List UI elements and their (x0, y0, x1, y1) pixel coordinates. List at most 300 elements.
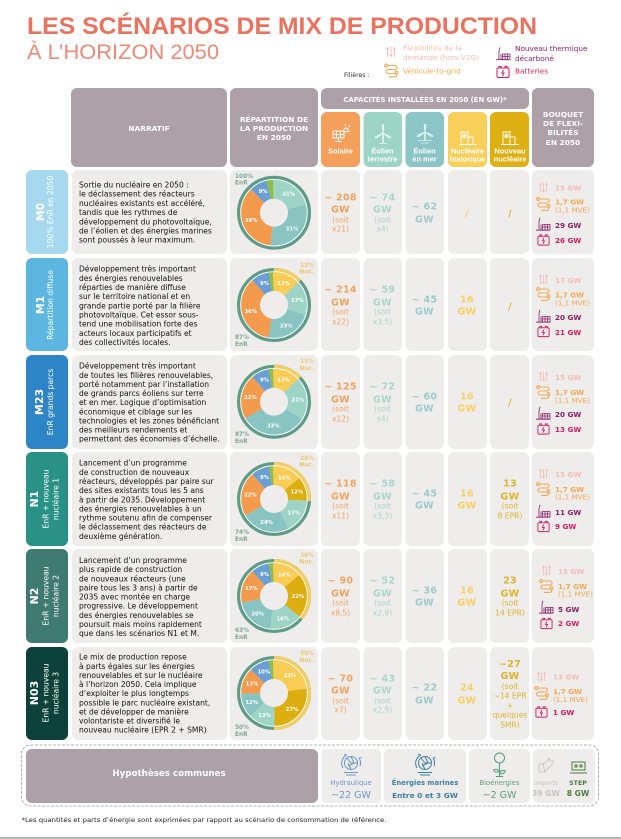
scenario row: M1 (26, 258, 594, 351)
title (27, 12, 537, 64)
capacities: N2: 14 EPR) (495, 609, 525, 618)
capacities: M23: GW (415, 404, 434, 415)
narrative: N03: à l’horizon 2050. Cela implique (79, 680, 197, 689)
legend: batteries (497, 66, 548, 78)
capacities: N03: GW (373, 686, 392, 697)
donut chart: N2: 17% (245, 586, 258, 592)
capacities: M23: x12) (332, 415, 349, 424)
narrative: N2: progressive. Le développement (79, 602, 198, 611)
capacities: N03: + (507, 701, 513, 710)
donut chart: M23 (230, 355, 318, 449)
capacities: N03 (321, 647, 529, 740)
scenario tag: M0 (26, 170, 68, 254)
capacities: M1: GW (331, 297, 350, 308)
flexibility bouquet: M1: 21 GW (555, 328, 581, 337)
legend: flexibilités de la demande (386, 44, 479, 62)
column header: nucléaire historique: Nucléaire (451, 146, 484, 156)
donut chart: N03: 12% (245, 700, 259, 706)
scenario tag: M1 (26, 258, 68, 351)
narrative: M1: des collectivités locales. (79, 338, 171, 347)
tile: hydraulique: Hydraulique (330, 779, 372, 787)
flexibility bouquet: N1: (1,1 MVE) (555, 493, 590, 502)
capacities: M1: GW (415, 307, 434, 318)
donut chart: M1: 36% (244, 309, 258, 315)
narrative: M0: sont poussés à leur maximum. (79, 236, 195, 245)
capacities: M23: GW (373, 395, 392, 406)
narrative: M23: permettant des économies d’échelle. (79, 435, 220, 444)
narrative: M0: Sortie du nucléaire en 2050 : (79, 180, 189, 190)
capacities: M23: GW (458, 404, 477, 415)
donut chart: M1: Nuc. (299, 270, 314, 276)
narrative: N1: de construction de nouveaux (79, 468, 190, 477)
capacities: N1: ~ 45 (412, 489, 437, 500)
column header: solaire: Solaire (328, 146, 353, 156)
scenario row: N1 (26, 452, 594, 546)
scenario tag: N2 (26, 549, 68, 643)
capacities: N2: GW (373, 588, 392, 599)
narrative: N1: deuxième génération. (79, 532, 162, 541)
scenario tag: M23: EnR grands parcs (46, 369, 55, 435)
capacities: M0: / (465, 209, 469, 220)
scenario row: N2 (26, 549, 594, 643)
donut chart: N2: 63% (235, 628, 249, 634)
capacities: M23: GW (331, 395, 350, 406)
column header: nouveau nucléaire: Nouveau (494, 146, 526, 156)
flexibility bouquet: N2: (1,1 MVE) (558, 590, 593, 599)
footnote: *Les quantités et parts d’énergie sont exprimées par rapport au scénario de consommation de référence. (22, 816, 386, 824)
donut chart: N1: 9% (260, 475, 270, 481)
capacities: M1: / (508, 301, 512, 312)
capacities: N03: ~ 43 (370, 674, 395, 685)
narrative: N2: plus rapide de construction (79, 565, 182, 574)
header: répartition de la production: RÉPARTITION DE (240, 115, 308, 124)
narrative: M23: porté notamment par l’installation (79, 380, 209, 389)
flexibility bouquet: N1: 9 GW (555, 522, 576, 531)
capacities: N1: ~ 118 (324, 479, 357, 490)
scenario tag: N2: nucléaire 2 (52, 575, 60, 617)
capacities: N03: (soit (502, 682, 518, 691)
capacities: M1: (soit (332, 308, 349, 317)
scenario tag: N2: N2 (28, 588, 41, 604)
donut chart: M1: 23% (280, 324, 293, 330)
capacities: N1: (soit (502, 502, 518, 511)
narrative: N1: Lancement d’un programme (79, 459, 187, 468)
capacities: N03: ~ 70 (328, 674, 353, 685)
capacities: M1: ~ 59 (370, 285, 395, 296)
scenario tag: N03 (26, 647, 68, 740)
header: répartition de la production: EN 2050 (257, 133, 291, 142)
flexibility bouquet: M1 (532, 258, 594, 351)
capacities: N2: (soit (374, 599, 391, 608)
donut chart: M23: Nuc. (299, 366, 314, 372)
donut chart: M23: 13% (277, 378, 291, 384)
capacities: M0: (soit (332, 216, 349, 225)
donut chart: N1: 22% (244, 492, 257, 498)
flexibility bouquet: N03: 1 GW (553, 708, 574, 717)
capacities: M23: ~ 72 (370, 382, 395, 393)
tile: énergies marines: Énergies marines (392, 778, 458, 787)
capacities: N1: (soit (332, 502, 349, 511)
donut chart: N2: Nuc. (299, 560, 314, 566)
flexibility bouquet: M1: 20 GW (555, 313, 581, 322)
capacities: M1: (soit (374, 308, 391, 317)
scenario tag: N03: nucléaire 3 (52, 672, 60, 714)
capacities: M23: 16 (460, 392, 474, 403)
capacities: N2: GW (501, 588, 520, 599)
donut chart: M0: 21% (282, 192, 296, 198)
narrative: N2: que dans les scénarios N1 et M. (79, 629, 199, 638)
flexibility bouquet: N2: 5 GW (558, 605, 579, 614)
donut chart: N1: 12% (290, 490, 304, 496)
capacities: N2: (soit (502, 599, 518, 608)
narrative: N2: paire tous les 3 ans) à partir de (79, 583, 198, 592)
capacities: M1: x3,5) (373, 318, 392, 327)
column header: éolien en mer: en mer (412, 154, 437, 164)
scenario row: N03 (26, 647, 594, 740)
donut chart: N03: 10% (257, 669, 271, 675)
donut chart: M1: 13% (300, 263, 314, 269)
capacities: N1: GW (415, 501, 434, 512)
donut chart: N03: 13% (246, 682, 259, 688)
donut chart: N1: 24% (260, 520, 274, 526)
legend: filières: Filières : (344, 71, 370, 79)
capacities: N1: GW (373, 491, 392, 502)
capacities: N1: ~ 58 (370, 479, 395, 490)
flexibility bouquet: N2: 2 GW (558, 619, 579, 628)
capacities: N03: (soit (374, 697, 391, 706)
capacities: N2 (321, 549, 529, 643)
flexibility bouquet: M1: 17 GW (555, 276, 581, 285)
column header: nucléaire historique (448, 112, 487, 167)
capacities: N2: x2,9) (373, 609, 392, 618)
legend: nouveau thermique décarboné: Nouveau thermique (515, 44, 588, 53)
flexibility bouquet: N03: 1,7 GW (553, 687, 582, 696)
capacities: M23 (321, 355, 529, 449)
scenario tag: N2: EnR + nouveau (42, 566, 50, 625)
capacities: M1: GW (373, 297, 392, 308)
legend: flexibilités de la demande: demande (hors V2G) (403, 53, 479, 62)
narrative: M0: développement du photovoltaïque, (79, 217, 212, 226)
title: À L’HORIZON 2050 (27, 41, 219, 64)
narrative: N1: à partir de 2035. Développement (79, 495, 205, 504)
capacities: N03: ~ 22 (412, 683, 437, 694)
capacities: M0: ~ 208 (324, 193, 357, 204)
capacities: N03: GW (331, 686, 350, 697)
narrative: N1: réacteurs, développés par paire sur (79, 477, 215, 486)
scenario tag: N03: N03 (28, 681, 41, 705)
scenario tag: M23 (26, 355, 68, 449)
capacities: M0: ~ 74 (370, 193, 395, 204)
capacities: M0: ~ 62 (412, 202, 437, 213)
panel: hypothèses communes: Hypothèses communes (112, 768, 226, 779)
capacities: M23: ~ 125 (324, 382, 357, 393)
flexibility bouquet: N03 (532, 647, 594, 740)
donut chart: M23: 21% (292, 397, 305, 403)
flexibility bouquet: M23: 13 GW (555, 425, 581, 434)
capacities: N1: x3,3) (373, 512, 392, 521)
capacities: N03: GW (415, 696, 434, 707)
header: capacités installées (321, 88, 529, 109)
column header: éolien en mer: Éolien (413, 146, 436, 156)
donut chart: N03: 13% (258, 713, 272, 719)
narrative: M23: de grands parcs éoliens sur terre (79, 389, 204, 398)
legend: batteries: Batteries (515, 66, 548, 76)
donut chart: N1 (230, 452, 318, 546)
capacities: M0 (321, 170, 529, 254)
donut chart: M0: 36% (245, 218, 258, 224)
scenario row: M0 (26, 170, 594, 254)
tile: hydraulique: ~22 GW (331, 790, 372, 801)
capacities: M1: ~ 45 (412, 295, 437, 306)
narrative: N03: et de développer de manière (79, 708, 189, 716)
legend: nouveau thermique décarboné: décarboné (515, 54, 554, 63)
scenario tag: N1: EnR + nouveau (42, 469, 50, 528)
donut chart: N1: EnR (235, 537, 248, 543)
donut chart: N2: 22% (292, 594, 305, 600)
donut chart: M0: EnR (235, 180, 248, 186)
donut chart: M1: EnR (235, 342, 248, 348)
flexibility bouquet: M0: 29 GW (555, 221, 581, 230)
donut chart: N2: 36% (300, 553, 314, 559)
narrative: N03: Le mix de production repose (79, 653, 187, 662)
capacities: N1: GW (331, 491, 350, 502)
donut chart: N2: 14% (278, 572, 291, 578)
header: bouquet de flexibilités: BOUQUET (543, 110, 583, 119)
capacities: N2: 23 (503, 576, 517, 587)
column header: éolien terrestre: Éolien (371, 146, 394, 156)
narrative: N03: renouvelables et sur le nucléaire (79, 671, 203, 680)
narrative: M0 (72, 170, 227, 254)
narrative: M23 (72, 355, 227, 449)
narrative: M1: photovoltaïque. Cet essor sous- (79, 310, 199, 320)
donut chart: N2 (230, 549, 318, 643)
narrative: M23: économique et ciblage sur les (79, 407, 192, 416)
capacities: N1: GW (458, 501, 477, 512)
scenario tag: M23: M23 (33, 389, 46, 415)
narrative: N1: rythme soutenu afin de compenser (79, 514, 213, 522)
flexibility bouquet: M23: 15 GW (555, 373, 581, 382)
flexibility bouquet: M23: 1,7 GW (555, 388, 584, 397)
scenario tag: M1: Répartition diffuse (46, 270, 55, 340)
capacities: M0: / (508, 209, 512, 220)
header: bouquet de flexibilités (532, 88, 594, 167)
legend: nouveau thermique décarboné (496, 44, 588, 63)
flexibility bouquet: M23: 20 GW (555, 410, 581, 419)
donut chart: N03 (230, 647, 318, 740)
capacities: M23: (soit (332, 405, 349, 414)
flexibility bouquet: N03: 13 GW (553, 672, 579, 682)
narrative: N03: nouveau nucléaire (EPR 2 + SMR) (79, 726, 207, 735)
narrative: N2: 2035 avec montée en charge (79, 592, 190, 602)
capacities: M0: x4) (376, 225, 389, 234)
narrative: N03: à parts égales sur les énergies (79, 662, 195, 671)
capacities: N2: GW (331, 588, 350, 599)
capacities: M23: / (508, 398, 512, 409)
header: répartition de la production (230, 88, 318, 167)
narrative: M23: des meilleurs rendements et (79, 426, 187, 435)
tile: bioénergies: Bioénergies (480, 779, 520, 787)
capacities: N03: SMR) (500, 721, 520, 730)
narrative: M1: Développement très important (79, 265, 196, 274)
capacities: M0: (soit (374, 216, 391, 225)
capacities: M0: GW (415, 215, 434, 226)
narrative: M1: réparties de manière diffuse (79, 283, 186, 292)
donut chart: N1: 17% (287, 510, 301, 516)
column header: éolien terrestre (364, 112, 402, 167)
narrative: N1: le déclassement des réacteurs de (79, 523, 207, 532)
flexibility bouquet: M0: 1,7 GW (555, 198, 584, 206)
tile: imports et STEP: 39 GW (532, 789, 561, 798)
narrative: M23: technologies et les zones bénéficiant (79, 416, 219, 426)
capacities: N2: ~ 52 (370, 576, 395, 587)
narrative: M23: de toutes les filières renouvelables, (79, 371, 213, 380)
narrative: M1 (72, 258, 227, 351)
header: narratif: NARRATIF (128, 124, 170, 133)
capacities: N1: 8 EPR) (498, 512, 522, 521)
capacities: N03: x7) (334, 706, 347, 715)
capacities: N03: x2,5) (373, 706, 392, 715)
legend: véhicule-to-grid: Véhicule-to-grid (403, 66, 461, 76)
narrative: N03 (72, 647, 227, 740)
narrative: M23: Développement très important (79, 362, 196, 371)
flexibility bouquet: N2 (532, 549, 594, 643)
tile: énergies marines: Entre 0 et 3 GW (392, 791, 458, 800)
narrative: N2: poursuit mais moins rapidement (79, 620, 202, 629)
capacities: N1 (321, 452, 529, 546)
scenario tag: M0: 100% EnR en 2050 (46, 176, 55, 248)
tile: bioénergies (469, 749, 530, 803)
tile: hydraulique (322, 749, 381, 803)
donut chart: M0: 9% (259, 189, 268, 195)
narrative: N2: de nouveaux réacteurs (une (79, 574, 186, 583)
scenario tag: N1: N1 (28, 491, 41, 507)
donut chart: M23: EnR (235, 439, 248, 445)
donut chart: M1: 13% (277, 281, 291, 287)
narrative: N2: des énergies renouvelables se (79, 611, 194, 620)
donut chart: N03: 50% (235, 725, 249, 731)
tile: imports et STEP: 8 GW (567, 789, 590, 798)
flexibility bouquet: M23: (1,1 MVE) (555, 396, 590, 405)
narrative: N1 (72, 452, 227, 546)
scenario tag: N1: nucléaire 1 (52, 478, 60, 520)
narrative: M23: et en mer. Logique d’optimisation (79, 398, 207, 407)
narrative: M1: acteurs locaux participatifs et (79, 329, 192, 338)
donut chart: M23: 22% (244, 395, 257, 401)
flexibility bouquet: M1: (1,1 MVE) (555, 298, 590, 307)
capacities: N1: 16 (460, 489, 474, 500)
narrative: N2: Lancement d’un programme (79, 556, 187, 565)
scenario tag: N1 (26, 452, 68, 546)
flexibility bouquet: M23 (532, 355, 594, 449)
capacities: M0: GW (373, 205, 392, 216)
donut chart: M1: 9% (260, 281, 270, 287)
capacities: N1: x11) (332, 512, 349, 521)
title: LES SCÉNARIOS DE MIX DE PRODUCTION (27, 12, 537, 40)
capacities: M23: x4) (376, 415, 389, 424)
capacities: M1: 16 (460, 295, 474, 306)
capacities: M23: ~ 60 (412, 392, 437, 403)
narrative: M0: tandis que les rythmes de (79, 208, 178, 217)
flexibility bouquet: N1: 11 GW (555, 508, 581, 517)
header: narratif (71, 88, 227, 167)
donut chart: M1: 17% (291, 298, 304, 304)
header: bouquet de flexibilités: BILITÉS (547, 128, 579, 137)
donut chart: M1: 87% (235, 335, 249, 341)
scenario tag: N03: EnR + nouveau (42, 663, 50, 722)
donut chart: N1: 26% (300, 456, 314, 462)
panel: hypothèses communes (26, 749, 318, 803)
donut chart: N03: 23% (284, 673, 297, 679)
capacities: N03: quelques (493, 711, 527, 720)
capacities: N03: 24 (460, 683, 474, 694)
narrative: N1: des sites existants tous les 5 ans (79, 486, 204, 495)
column header: éolien en mer (406, 112, 444, 167)
flexibility bouquet: N1: 15 GW (555, 470, 581, 479)
flexibility bouquet: M0 (532, 170, 594, 254)
legend: filières (344, 44, 588, 79)
column header: nouveau nucléaire: nucléaire (494, 154, 526, 164)
narrative: N03: possible le parc nucléaire existant, (79, 698, 210, 707)
capacities: M23: (soit (374, 405, 391, 414)
flexibility bouquet: N1: 1,7 GW (555, 485, 584, 494)
capacities: N2: x8,5) (331, 609, 350, 618)
donut chart: M0 (230, 170, 318, 254)
donut chart: M23: 87% (235, 432, 249, 438)
donut chart: N03: 50% (300, 651, 314, 657)
capacities: M1: ~ 214 (324, 285, 357, 296)
flexibility bouquet: N1 (532, 452, 594, 546)
capacities: N2: (soit (332, 599, 349, 608)
capacities: N03: GW (501, 671, 520, 682)
column header: nouveau nucléaire (490, 112, 529, 167)
flexibility bouquet: M0: (1,1 MVE) (555, 206, 590, 215)
donut chart: M23: 13% (300, 359, 314, 365)
flexibility bouquet: M0: 15 GW (555, 184, 581, 192)
header: bouquet de flexibilités: DE FLEXI- (543, 119, 583, 128)
header: bouquet de flexibilités: EN 2050 (546, 138, 580, 147)
capacities: N1: GW (501, 491, 520, 502)
capacities: N2: GW (415, 598, 434, 609)
donut chart: N1: 14% (278, 475, 291, 481)
header: répartition de la production: LA PRODUCTION (240, 124, 308, 133)
narrative: N1: des énergies renouvelables à un (79, 504, 202, 513)
flexibility bouquet: N2: 15 GW (558, 567, 584, 576)
narrative: M1: grande partie porté par la filière (79, 301, 201, 310)
common assumptions: dashed frame (22, 745, 598, 806)
narrative: M0: le déclassement des réacteurs (79, 190, 195, 199)
scenario tag: M0: M0 (34, 202, 47, 221)
donut chart: M0: 31% (286, 227, 299, 233)
donut chart: N1: 74% (235, 530, 249, 536)
column header: éolien terrestre: terrestre (368, 154, 398, 164)
tile: énergies marines (384, 749, 466, 803)
donut chart: N2: EnR (235, 635, 248, 641)
capacities: N2: 16 (460, 586, 474, 597)
narrative: M1: tend une mobilisation forte des (79, 320, 197, 329)
capacities: N03: (soit (332, 697, 349, 706)
donut chart: M23: 33% (267, 424, 280, 430)
capacities: N1: (soit (374, 502, 391, 511)
donut chart: N2: 9% (260, 572, 270, 578)
capacities: N03: GW (458, 696, 477, 707)
narrative: M1: sur le territoire national et en (79, 292, 190, 301)
tile: imports et STEP: STEP (569, 780, 587, 787)
flexibility bouquet: M0: 26 GW (555, 236, 581, 245)
capacities: M1: GW (458, 307, 477, 318)
flexibility bouquet: N03: (1,1 MVE) (553, 695, 588, 704)
narrative: M0: nucléaires existants est accéléré, (79, 199, 205, 208)
header: capacités installées: CAPACITÉS INSTALLÉES EN 2050 (EN GW)* (343, 95, 507, 104)
